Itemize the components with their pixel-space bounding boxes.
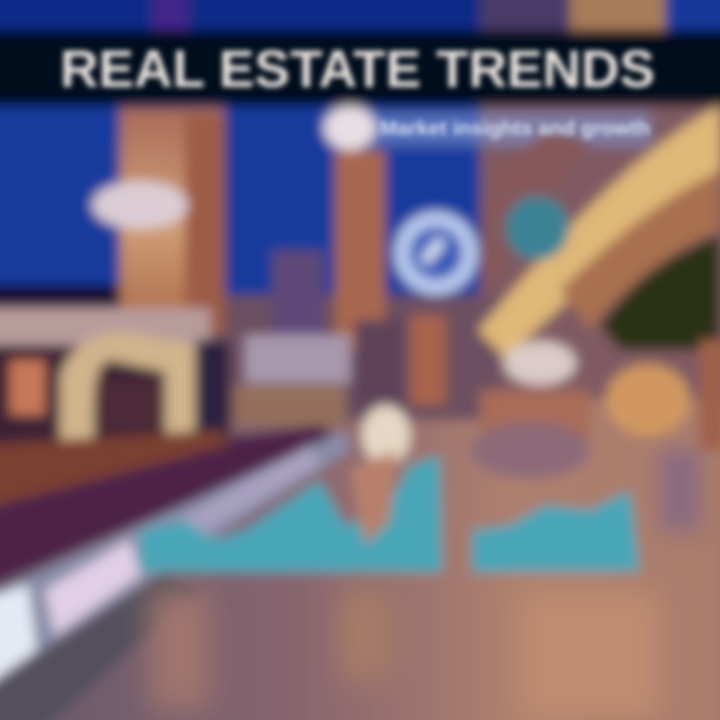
pale marker on chart [350, 405, 410, 545]
title: REAL ESTATE TRENDS [60, 40, 655, 99]
chart: left teal area [140, 455, 442, 572]
left low-rise arcade [0, 285, 350, 460]
subtitle block [324, 106, 651, 150]
right curved building [478, 105, 720, 450]
icon: ring chart [402, 219, 470, 287]
left tower [92, 108, 225, 333]
foreground paving [150, 450, 700, 720]
subtitle: Market insights and growth [380, 118, 650, 140]
centre towers [272, 150, 446, 410]
mauve block above right chart [470, 422, 590, 478]
icon: teal circle [505, 196, 569, 260]
road kerb with white dashes [0, 425, 350, 720]
chart: right teal area [472, 490, 640, 572]
title banner [0, 30, 720, 106]
